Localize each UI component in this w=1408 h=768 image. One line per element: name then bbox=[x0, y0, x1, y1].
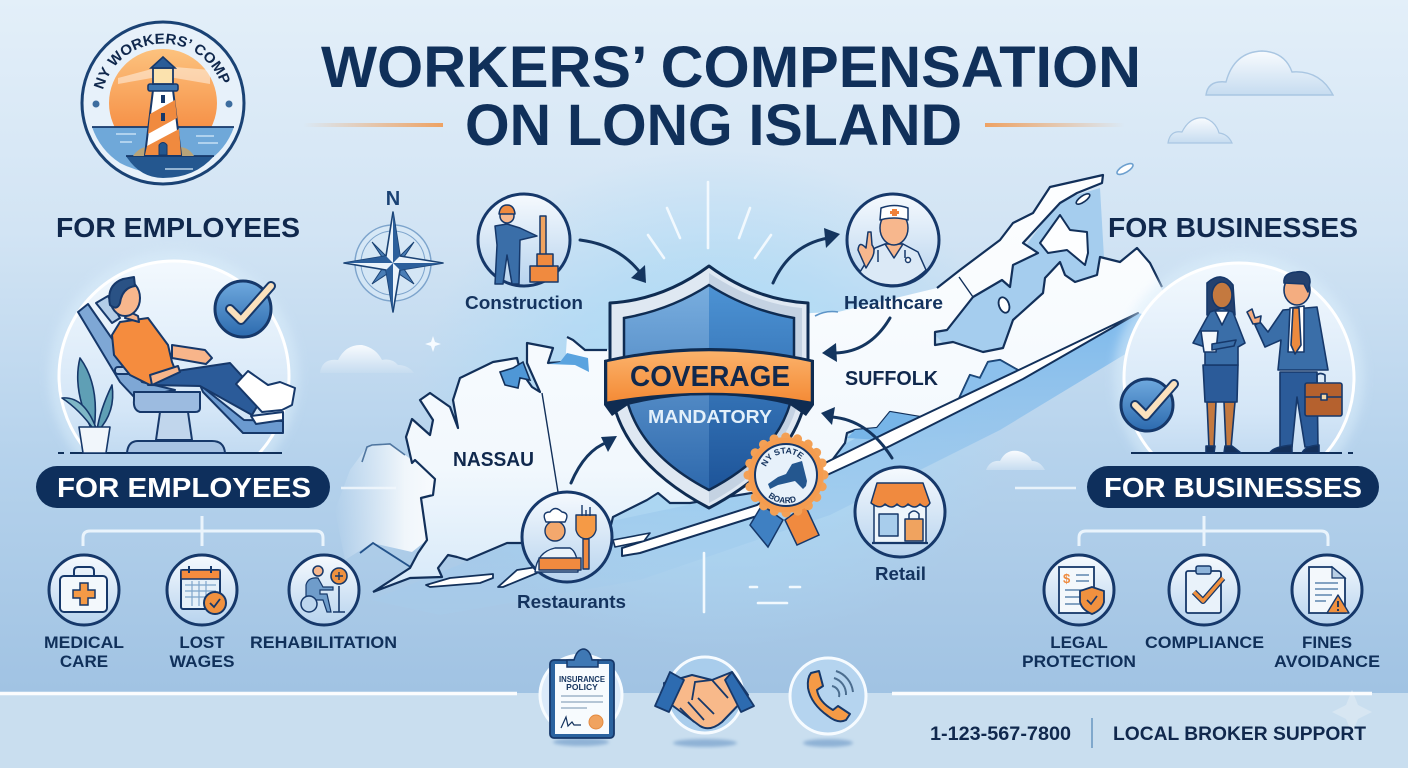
arrows to shield bbox=[571, 228, 892, 483]
pill: for employees: FOR EMPLOYEES bbox=[57, 472, 311, 503]
arrow: healthcare to shield bbox=[822, 318, 890, 362]
arrow: shield to healthcare bbox=[773, 228, 840, 283]
map: county border lines bbox=[542, 277, 973, 492]
arrow: construction to shield bbox=[580, 240, 646, 283]
banner text: COVERAGE bbox=[630, 361, 790, 393]
shield inner left bbox=[624, 285, 709, 490]
label: legal protection: LEGAL bbox=[1050, 633, 1108, 652]
label: fines avoidance: FINES bbox=[1302, 633, 1352, 652]
cloud: right of map bbox=[986, 451, 1045, 470]
logo island bbox=[133, 147, 194, 156]
illustration circle bbox=[50, 260, 298, 454]
icon: insurance policy clipboard bbox=[540, 649, 622, 746]
map: faded western land bbox=[335, 444, 435, 560]
label: fines avoidance: AVOIDANCE bbox=[1274, 652, 1380, 671]
footer band bbox=[0, 649, 1408, 768]
shield inner right bbox=[709, 285, 794, 490]
shield text: MANDATORY bbox=[648, 407, 772, 427]
illustration circle bbox=[1110, 262, 1364, 454]
map: mainland bbox=[373, 175, 1165, 592]
pill: for businesses bbox=[1087, 466, 1379, 508]
phone number: 1-123-567-7800 bbox=[930, 724, 1071, 745]
label: rehabilitation: REHABILITATION bbox=[250, 633, 397, 652]
lighthouse tower bbox=[145, 90, 181, 155]
icon: legal protection bbox=[1044, 555, 1114, 625]
icon: fines avoidance bbox=[1292, 555, 1362, 625]
map: Shelter Island bbox=[1040, 215, 1088, 265]
logo sun bbox=[109, 49, 217, 157]
icon: compliance bbox=[1169, 555, 1239, 625]
map: Hempstead bay water bbox=[500, 362, 530, 388]
map: Long Island bbox=[335, 161, 1165, 615]
icon: rehabilitation bbox=[289, 555, 359, 625]
label: compliance: COMPLIANCE bbox=[1145, 633, 1264, 652]
node: construction bbox=[465, 194, 583, 313]
seal bottom text bbox=[768, 497, 804, 503]
banner bbox=[604, 348, 814, 416]
pill: for employees bbox=[36, 466, 330, 508]
icon: plant bbox=[62, 358, 113, 453]
illustration: reclining person bbox=[109, 277, 295, 424]
label: lost wages: LOST bbox=[179, 633, 225, 652]
panel: for employees bbox=[36, 212, 397, 671]
seal top text bbox=[766, 453, 806, 467]
logo badge: lighthouse bbox=[80, 20, 246, 186]
retail storefront bbox=[871, 483, 930, 543]
illustration: reclining chair bbox=[78, 296, 283, 453]
clouds bbox=[320, 51, 1333, 470]
construction worker bbox=[495, 205, 558, 284]
label: construction: Construction bbox=[465, 293, 583, 313]
icon: insurance policy clipboard: POLICY bbox=[566, 682, 598, 692]
icon: checkmark bbox=[1121, 379, 1174, 431]
healthcare nurse bbox=[858, 206, 926, 285]
compass N label: N bbox=[386, 188, 400, 210]
icon: checkmark bbox=[215, 281, 271, 337]
seal: NY State Board: BOARD bbox=[768, 492, 796, 504]
icon: lost wages bbox=[167, 555, 237, 625]
title rule left bbox=[303, 123, 443, 127]
map: small islands bbox=[997, 296, 1011, 314]
logo badge: lighthouse: NY WORKERS’ COMP bbox=[94, 34, 230, 89]
map label: Suffolk: SUFFOLK bbox=[845, 368, 939, 390]
icon: handshake bbox=[655, 657, 754, 747]
label: restaurants: Restaurants bbox=[517, 592, 626, 612]
clipboard text: INSURANCE bbox=[559, 674, 605, 684]
seal: NY State Board bbox=[744, 432, 828, 548]
node: restaurants bbox=[517, 492, 626, 612]
title bbox=[303, 35, 1141, 158]
cloud: left of map bbox=[320, 345, 414, 373]
central glow bbox=[415, 150, 1015, 650]
node: retail bbox=[855, 467, 945, 584]
title line 2: ON LONG ISLAND bbox=[465, 93, 962, 158]
seal ribbons bbox=[750, 505, 783, 547]
map: barrier islands bbox=[622, 313, 1138, 556]
icon: compass rose bbox=[344, 188, 443, 312]
icon: phone bbox=[790, 658, 866, 747]
heading: for businesses: FOR BUSINESSES bbox=[1108, 212, 1358, 243]
shield: coverage mandatory bbox=[604, 266, 814, 508]
icon: medical care bbox=[49, 555, 119, 625]
illustration: businessman bbox=[1247, 272, 1342, 453]
seal state silhouette bbox=[768, 461, 807, 489]
title rule right bbox=[985, 123, 1125, 127]
icon: legal protection: $ bbox=[1063, 571, 1071, 586]
label: legal protection: PROTECTION bbox=[1022, 652, 1136, 671]
panel: for businesses bbox=[1015, 212, 1380, 671]
illustration: businesswoman bbox=[1193, 277, 1245, 453]
label: medical care: CARE bbox=[60, 652, 108, 671]
node: healthcare bbox=[844, 194, 943, 313]
shield outer frame bbox=[610, 266, 808, 508]
title line 1: WORKERS’ COMPENSATION bbox=[321, 35, 1141, 100]
map: coastline outline bbox=[373, 175, 1162, 592]
sparkle bbox=[425, 336, 441, 352]
cloud: top right small bbox=[1168, 118, 1232, 143]
arrow: restaurants to shield bbox=[571, 436, 617, 483]
logo dots bbox=[92, 100, 100, 108]
restaurants chef bbox=[535, 505, 596, 572]
seal: NY State Board: NY STATE bbox=[761, 447, 804, 466]
heading: for employees: FOR EMPLOYEES bbox=[56, 212, 300, 243]
arrow: retail to shield bbox=[821, 407, 892, 458]
broker support text: LOCAL BROKER SUPPORT bbox=[1113, 724, 1366, 745]
map: Oyster bay water bbox=[548, 353, 589, 372]
logo water bbox=[92, 127, 234, 174]
label: retail: Retail bbox=[875, 564, 926, 584]
cloud: top right large bbox=[1206, 51, 1333, 95]
map: sea shadow along south shore bbox=[372, 312, 1165, 615]
label: medical care: MEDICAL bbox=[44, 633, 124, 652]
label: lost wages: WAGES bbox=[170, 652, 234, 671]
logo ring text bbox=[103, 44, 223, 90]
map label: Nassau: NASSAU bbox=[453, 449, 534, 471]
label: healthcare: Healthcare bbox=[844, 293, 943, 313]
map: Peconic bay water bbox=[935, 188, 1105, 355]
pill: for businesses: FOR BUSINESSES bbox=[1104, 472, 1362, 503]
rays around shield bbox=[648, 182, 800, 612]
